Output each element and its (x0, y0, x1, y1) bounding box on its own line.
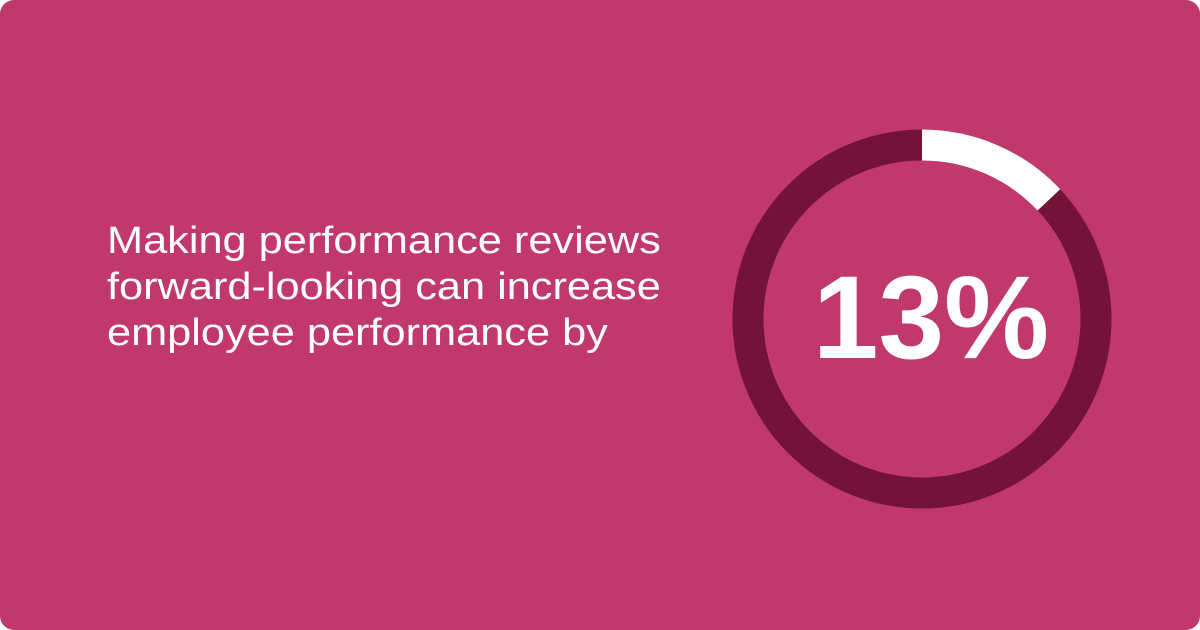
text block: statement: forward-looking can increase (107, 266, 661, 308)
text block: statement: employee performance by (107, 312, 608, 354)
text block: statement: Making performance reviews (107, 220, 661, 262)
text block: statement (107, 220, 661, 354)
chart: donut ring 13%: 13% (813, 252, 1049, 384)
